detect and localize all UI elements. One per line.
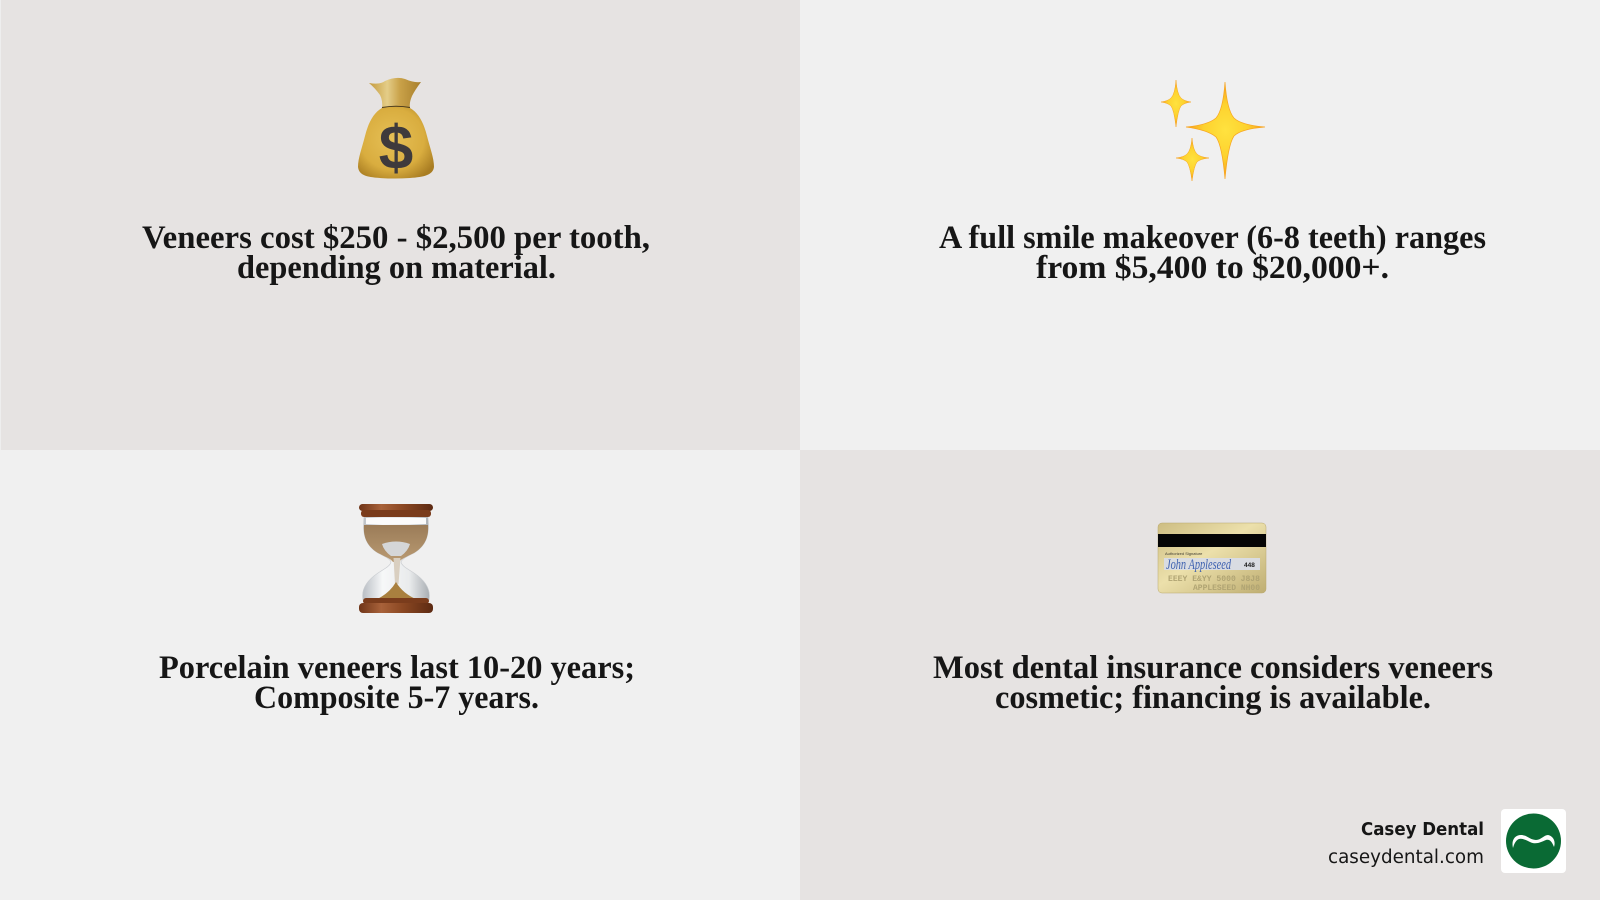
panel: insurance (800, 450, 1600, 900)
icon: hourglass (359, 504, 433, 613)
brand text: caseydental.com (1328, 847, 1484, 868)
icon: credit card: 448 (1244, 562, 1255, 569)
heading: smile makeover: from $5,400 to $20,000+. (1036, 250, 1389, 286)
icon: credit card (1158, 523, 1266, 593)
heading: insurance: cosmetic; financing is available. (995, 680, 1431, 716)
heading: lifespan: Porcelain veneers last 10-20 years; (159, 650, 635, 686)
brand text: Casey Dental (1361, 820, 1484, 840)
icon: credit card: EEEY E&YY 5000 J8J8 (1168, 575, 1260, 584)
icon: credit card: Authorized Signature (1165, 551, 1203, 556)
icon: credit card: John Appleseed (1166, 557, 1231, 573)
heading: insurance (933, 650, 1493, 716)
heading: cost: depending on material. (237, 250, 556, 286)
icon: credit card: APPLESEED NH00 (1193, 584, 1260, 593)
heading: cost (142, 220, 650, 286)
heading: smile makeover (939, 220, 1486, 286)
icon: money bag: $ (379, 114, 413, 183)
logo (1501, 809, 1566, 873)
icon: money bag (358, 78, 434, 183)
panel: lifespan (0, 450, 800, 900)
heading: lifespan: Composite 5-7 years. (254, 680, 539, 716)
icon: sparkles (1161, 80, 1265, 181)
heading: insurance: Most dental insurance considers veneers (933, 650, 1493, 686)
heading: lifespan (159, 650, 635, 716)
panel: cost (0, 0, 800, 450)
panel: smile makeover (800, 0, 1600, 450)
brand text (1328, 820, 1484, 868)
heading: cost: Veneers cost $250 - $2,500 per tooth, (142, 220, 650, 256)
heading: smile makeover: A full smile makeover (6-8 teeth) ranges (939, 220, 1486, 256)
